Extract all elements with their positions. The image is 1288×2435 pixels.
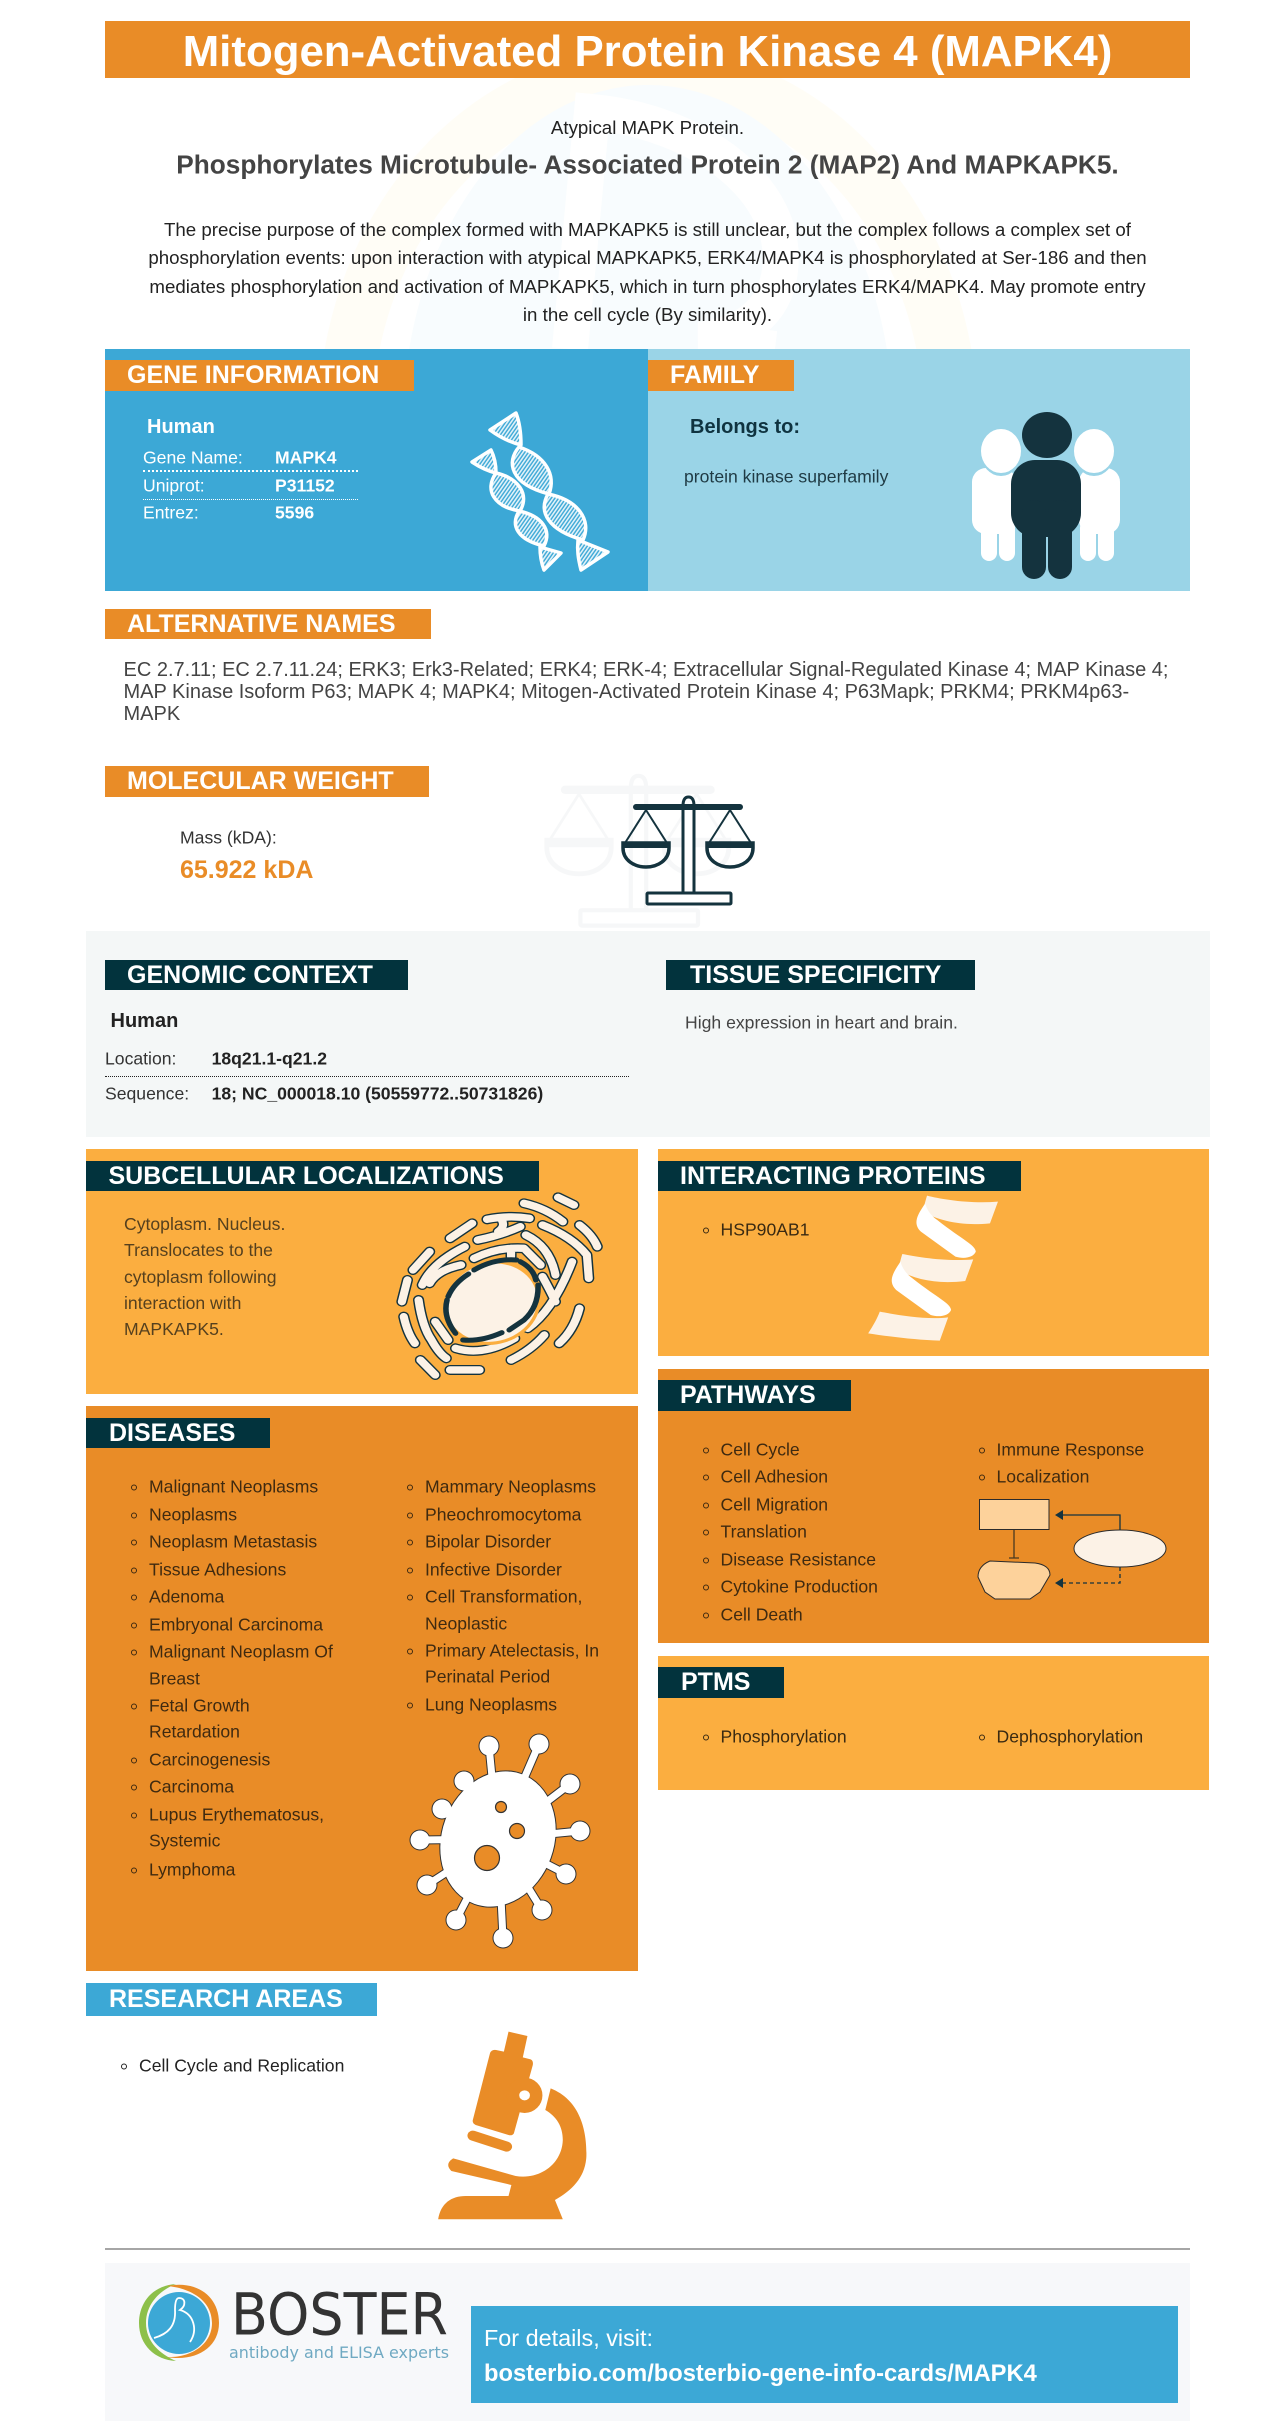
disease list: left column: Neoplasm Metastasis	[149, 1531, 317, 1551]
disease list: left column: Carcinogenesis	[149, 1749, 270, 1769]
gene name row: MAPK4	[275, 447, 337, 467]
heading: research areas	[86, 1983, 377, 2016]
heading: family	[648, 360, 794, 391]
disease list: left column: Malignant Neoplasms	[149, 1476, 318, 1496]
heading: pathways: PATHWAYS	[680, 1381, 816, 1409]
research area item: Cell Cycle and Replication	[139, 2055, 344, 2075]
panel: genomic context and tissue specificity	[86, 931, 1210, 1137]
icon: protein ribbon	[868, 1196, 998, 1341]
heading: research areas: RESEARCH AREAS	[109, 1985, 343, 2013]
pathway list: right column: Immune Response	[996, 1439, 1144, 1459]
entrez row: Entrez:	[143, 502, 199, 522]
location row: Location:	[105, 1048, 176, 1068]
heading: subcellular localizations: SUBCELLULAR LOCALIZATIONS	[108, 1162, 504, 1190]
disease list: left column: Carcinoma	[149, 1776, 234, 1796]
description paragraph: in the cell cycle (By similarity).	[523, 304, 772, 325]
disease list: right column	[407, 1476, 599, 1714]
belongs to label: Belongs to:	[690, 416, 800, 438]
mass label: Mass (kDA):	[180, 827, 277, 847]
panel: family	[648, 349, 1190, 591]
heading: pathways	[658, 1380, 851, 1411]
disease list: left column	[131, 1476, 333, 1879]
panel: gene information	[105, 349, 648, 591]
heading: interacting proteins: INTERACTING PROTEINS	[680, 1162, 986, 1190]
gene name row	[143, 446, 358, 472]
pathway list: left column: Cytokine Production	[720, 1576, 878, 1596]
localization text	[124, 1214, 285, 1339]
disease list: right column: Pheochromocytoma	[425, 1504, 581, 1524]
disease list: right column: Neoplastic	[425, 1613, 507, 1633]
heading: molecular weight: MOLECULAR WEIGHT	[127, 767, 394, 795]
disease list: right column: Lung Neoplasms	[425, 1694, 557, 1714]
localization text: interaction with	[124, 1293, 241, 1313]
disease list: right column: Primary Atelectasis, In	[425, 1640, 599, 1660]
logo: Boster: antibody and ELISA experts	[229, 2343, 449, 2362]
heading: gene information: GENE INFORMATION	[127, 361, 379, 389]
pathway list: left column: Cell Death	[720, 1604, 803, 1624]
pathway list: right column: Localization	[996, 1466, 1089, 1486]
disease list: left column: Fetal Growth	[149, 1695, 250, 1715]
panel: interacting proteins	[658, 1149, 1209, 1356]
PTM item: dephosphorylation: Dephosphorylation	[996, 1726, 1143, 1746]
heading: alternative names: ALTERNATIVE NAMES	[127, 610, 396, 638]
uniprot row: P31152	[275, 475, 335, 495]
disease list: right column: Mammary Neoplasms	[425, 1476, 596, 1496]
pathway list: left column: Disease Resistance	[720, 1549, 876, 1569]
disease list: left column: Embryonal Carcinoma	[149, 1614, 323, 1634]
visit label: For details, visit:	[484, 2325, 653, 2351]
disease list: right column: Cell Transformation,	[425, 1586, 582, 1606]
alternative names text: MAP Kinase Isoform P63; MAPK 4; MAPK4; Mitogen-Activated Protein Kinase 4; P63Mapk; PRKM4; PRKM4p63-	[124, 681, 1129, 703]
panel: PTMs	[658, 1656, 1209, 1790]
call to action box	[471, 2306, 1178, 2403]
localization text: Translocates to the	[124, 1240, 273, 1260]
species label: Human	[147, 416, 215, 438]
pathway list: left column: Cell Cycle	[720, 1439, 800, 1459]
heading: diseases	[86, 1418, 270, 1448]
icon: balance scale	[544, 774, 755, 928]
footer divider	[105, 2248, 1190, 2250]
disease list: right column: Infective Disorder	[425, 1559, 562, 1579]
heading: family: FAMILY	[670, 361, 759, 389]
disease list: left column: Malignant Neoplasm Of	[149, 1641, 333, 1661]
title banner: Mitogen-Activated Protein Kinase 4 (MAPK4)	[183, 27, 1112, 76]
location row	[105, 1045, 629, 1077]
family value: protein kinase superfamily	[684, 466, 888, 486]
pathway list: left column: Cell Adhesion	[720, 1466, 828, 1486]
panel: diseases	[86, 1406, 638, 1971]
pathway list: right column	[979, 1439, 1144, 1486]
entrez row	[143, 502, 314, 522]
description paragraph	[148, 219, 1147, 325]
localization text: cytoplasm following	[124, 1267, 277, 1287]
localization text: MAPKAPK5.	[124, 1319, 224, 1339]
disease list: left column: Systemic	[149, 1830, 220, 1850]
gene name row: Gene Name:	[143, 447, 243, 467]
description paragraph: phosphorylation events: upon interaction with atypical MAPKAPK5, ERK4/MAPK4 is phosphorylated at Ser-186 and then	[148, 247, 1147, 268]
uniprot row: Uniprot:	[143, 475, 205, 495]
heading: tissue specificity: TISSUE SPECIFICITY	[690, 961, 941, 989]
disease list: left column: Adenoma	[149, 1586, 224, 1606]
panel: pathways	[658, 1369, 1209, 1643]
protein list item: HSP90AB1	[720, 1219, 810, 1239]
tissue specificity text: High expression in heart and brain.	[685, 1012, 958, 1032]
subtitle: function: Phosphorylates Microtubule- Associated Protein 2 (MAP2) And MAPKAPK5.	[176, 149, 1119, 179]
icon: virus	[410, 1734, 590, 1948]
disease list: right column: Bipolar Disorder	[425, 1531, 551, 1551]
pathway list: left column: Cell Migration	[720, 1494, 828, 1514]
heading: diseases: DISEASES	[109, 1419, 235, 1447]
description paragraph: The precise purpose of the complex formed with MAPKAPK5 is still unclear, but the complex follows a complex set of	[164, 219, 1131, 240]
disease list: left column: Neoplasms	[149, 1504, 237, 1524]
panel: footer	[105, 2263, 1190, 2421]
disease list: right column: Perinatal Period	[425, 1666, 550, 1686]
description paragraph: mediates phosphorylation and activation of MAPKAPK5, which in turn phosphorylates ERK4/MAPK4. May promote entry	[149, 276, 1146, 297]
location row: 18q21.1-q21.2	[212, 1048, 327, 1068]
icon: DNA helix	[470, 411, 610, 572]
pathway list: left column	[703, 1439, 878, 1624]
alternative names text: EC 2.7.11; EC 2.7.11.24; ERK3; Erk3-Related; ERK4; ERK-4; Extracellular Signal-Regulated Kinase 4; MAP Kinase 4;	[124, 659, 1168, 681]
icon: people group	[972, 412, 1120, 579]
background watermark logo	[325, 78, 971, 349]
disease list: left column: Tissue Adhesions	[149, 1559, 286, 1579]
logo: Boster	[139, 2280, 449, 2362]
sequence row: 18; NC_000018.10 (50559772..50731826)	[212, 1083, 543, 1103]
URL: bosterbio.com/bosterbio-gene-info-cards/MAPK4	[484, 2361, 1037, 2387]
subtitle: protein type: Atypical MAPK Protein.	[551, 117, 744, 138]
localization text: Cytoplasm. Nucleus.	[124, 1214, 285, 1234]
species label: Human	[110, 1010, 178, 1032]
alternative names text	[124, 659, 1168, 725]
icon: endoplasmic reticulum and nucleus	[396, 1192, 603, 1380]
heading: PTMs: PTMS	[681, 1668, 750, 1696]
icon: pathway diagram	[978, 1499, 1166, 1600]
disease list: left column: Lymphoma	[149, 1859, 235, 1879]
heading: PTMs	[658, 1667, 784, 1698]
alternative names text: MAPK	[124, 703, 180, 725]
sequence row: Sequence:	[105, 1083, 189, 1103]
disease list: left column: Retardation	[149, 1721, 240, 1741]
pathway list: left column: Translation	[720, 1521, 807, 1541]
disease list: left column: Lupus Erythematosus,	[149, 1804, 324, 1824]
uniprot row	[143, 474, 358, 500]
mass value: 65.922 kDA	[180, 856, 313, 884]
PTM item: phosphorylation: Phosphorylation	[720, 1726, 847, 1746]
disease list: left column: Breast	[149, 1668, 200, 1688]
heading: genomic context: GENOMIC CONTEXT	[127, 961, 373, 989]
icon: microscope	[438, 2032, 586, 2220]
panel: subcellular localizations	[86, 1149, 638, 1394]
entrez row: 5596	[275, 502, 314, 522]
